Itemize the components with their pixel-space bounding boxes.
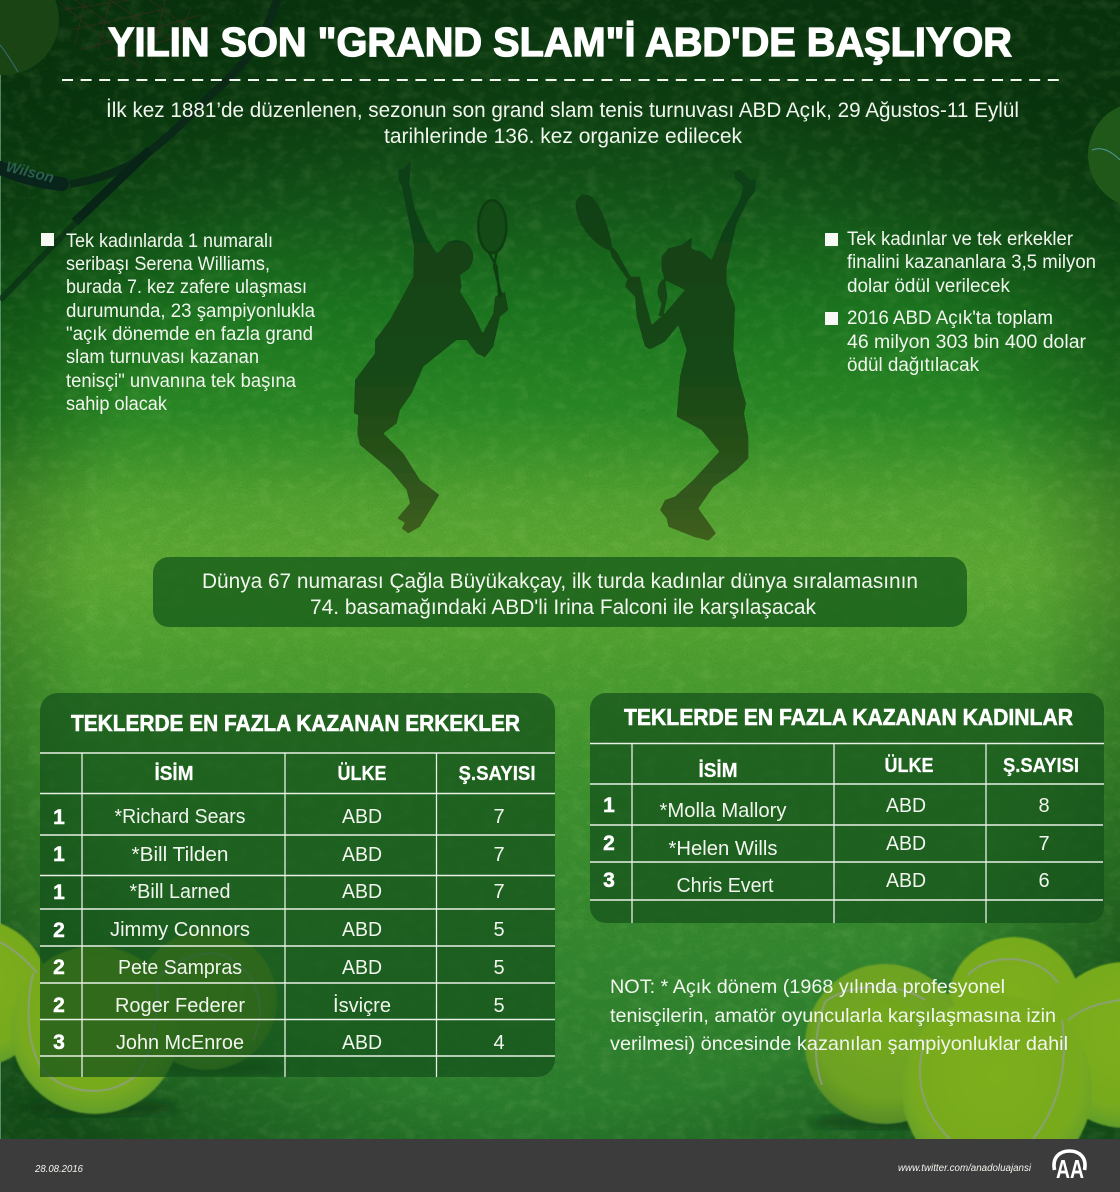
table header: İSİM (698, 759, 738, 782)
date: 28.08.2016 (34, 1164, 83, 1175)
table header: Ş.SAYISI (458, 763, 536, 785)
icon: tennis racket top left (0, 0, 277, 300)
callout: Çağla Büyükakçay: 74. basamağındaki ABD'li Irina Falconi ile karşılaşacak (310, 596, 816, 619)
table header: Ş.SAYISI (1003, 755, 1079, 777)
table rows: ABD (886, 870, 926, 892)
table rows: ABD (342, 881, 382, 903)
footer bar (0, 1139, 1120, 1192)
note: NOT: * Açık dönem (1968 yılında profesyonel (610, 976, 1005, 998)
text block: right bullets: 2016 ABD Açık'ta toplam (847, 308, 1053, 329)
table rows: 4 (493, 1032, 505, 1054)
note: tenisçilerin, amatör oyuncularla karşılaşmasına izin (610, 1005, 1056, 1027)
icon: AA logo (1054, 1151, 1085, 1184)
note (610, 976, 1068, 1055)
text block: right bullets: dolar ödül verilecek (847, 276, 1010, 297)
table rows: 5 (493, 957, 505, 979)
silhouette: male player (354, 161, 508, 533)
table rows: ABD (342, 806, 382, 828)
text block: left bullet: sahip olacak (66, 394, 167, 415)
table rows: ABD (342, 1032, 382, 1054)
source url: www.twitter.com/anadoluajansi (898, 1163, 1032, 1174)
table rows: Pete Sampras (118, 957, 242, 979)
table rows: *Helen Wills (668, 838, 778, 860)
table rows: 2 (53, 956, 65, 979)
subtitle: tarihlerinde 136. kez organize edilecek (384, 124, 742, 148)
text block: left bullet (41, 231, 315, 415)
bullet 2 (825, 312, 838, 325)
table header: ÜLKE (338, 762, 386, 785)
table rows: 7 (1038, 833, 1050, 855)
bullet (41, 233, 54, 246)
table rows: ABD (886, 795, 926, 817)
subtitle: İlk kez 1881’de düzenlenen, sezonun son grand slam tenis turnuvası ABD Açık, 29 Ağustos-11 Eylül (106, 98, 1019, 122)
icon: dim tennis balls top corners (0, 0, 1120, 208)
callout: Çağla Büyükakçay: Dünya 67 numarası Çağla Büyükakçay, ilk turda kadınlar dünya sıralamasının (202, 570, 918, 593)
table header: ÜLKE (884, 754, 934, 777)
table rows: 7 (493, 844, 505, 866)
note: verilmesi) öncesinde kazanılan şampiyonluklar dahil (610, 1033, 1068, 1055)
table rows: *Bill Larned (130, 881, 230, 903)
text block: left bullet: slam turnuvası kazanan (66, 347, 259, 368)
silhouettes: tennis players (354, 161, 756, 541)
text block: left bullet: seribaşı Serena Williams, (66, 254, 270, 275)
text block: right bullets: finalini kazananlara 3,5 milyon (847, 252, 1096, 273)
table rows: 8 (1038, 795, 1050, 817)
table rows: Roger Federer (115, 995, 245, 1017)
table rows: 2 (53, 919, 65, 942)
bullet 1 (825, 233, 838, 246)
icon: tennis balls bottom right (804, 936, 1120, 1139)
table rows: ABD (342, 919, 382, 941)
table rows: 1 (53, 806, 65, 829)
table rows: *Richard Sears (114, 806, 246, 828)
text block: left bullet: burada 7. kez zafere ulaşması (66, 277, 307, 298)
text block: right bullets: ödül dağıtılacak (847, 355, 979, 376)
table rows: İsviçre (333, 994, 391, 1017)
table rows: *Molla Mallory (660, 800, 786, 822)
table rows (603, 794, 1050, 897)
table rows: ABD (342, 957, 382, 979)
table header (698, 754, 1079, 782)
text block: left bullet: durumunda, 23 şampiyonlukla (66, 301, 315, 322)
subtitle (106, 98, 1019, 148)
table rows: Jimmy Connors (110, 919, 250, 941)
table rows: 7 (493, 806, 505, 828)
table rows: 1 (53, 843, 65, 866)
table rows: 1 (603, 794, 615, 817)
table rows: 7 (493, 881, 505, 903)
panel: women's table (590, 693, 1104, 923)
callout: Çağla Büyükakçay (153, 557, 967, 627)
table header: İSİM (154, 762, 194, 785)
icon: tennis balls bottom left (0, 919, 285, 1116)
text block: left bullet: tenisçi" unvanına tek başına (66, 371, 296, 392)
table rows: 6 (1038, 870, 1050, 892)
text block: right bullets (825, 229, 1096, 376)
table rows: *Bill Tilden (132, 844, 228, 866)
heading: men's table: TEKLERDE EN FAZLA KAZANAN ERKEKLER (71, 710, 520, 736)
silhouette: female player (576, 169, 756, 541)
table header (154, 762, 536, 785)
table rows: 5 (493, 995, 505, 1017)
table rows: 2 (53, 994, 65, 1017)
title: YILIN SON "GRAND SLAM"İ ABD'DE BAŞLIYOR (108, 19, 1012, 65)
icon: AA logo: AA (1056, 1154, 1084, 1184)
table rows: ABD (886, 833, 926, 855)
table rows: 3 (53, 1031, 65, 1054)
text block: right bullets: Tek kadınlar ve tek erkekler (847, 229, 1074, 250)
table rows: Chris Evert (676, 875, 774, 897)
table rows: 2 (603, 832, 615, 855)
table rows: 5 (493, 919, 505, 941)
text block: right bullets: 46 milyon 303 bin 400 dolar (847, 332, 1087, 353)
text block: left bullet: Tek kadınlarda 1 numaralı (66, 231, 273, 252)
table rows: ABD (342, 844, 382, 866)
text block: left bullet: "açık dönemde en fazla grand (66, 324, 313, 345)
icon: tennis racket top left: Wilson (4, 158, 56, 187)
table rows: John McEnroe (116, 1032, 244, 1054)
panel: men's table (40, 693, 555, 1077)
table rows: 1 (53, 881, 65, 904)
heading: women's table: TEKLERDE EN FAZLA KAZANAN KADINLAR (624, 704, 1073, 730)
table rows (53, 806, 505, 1054)
table rows: 3 (603, 869, 615, 892)
